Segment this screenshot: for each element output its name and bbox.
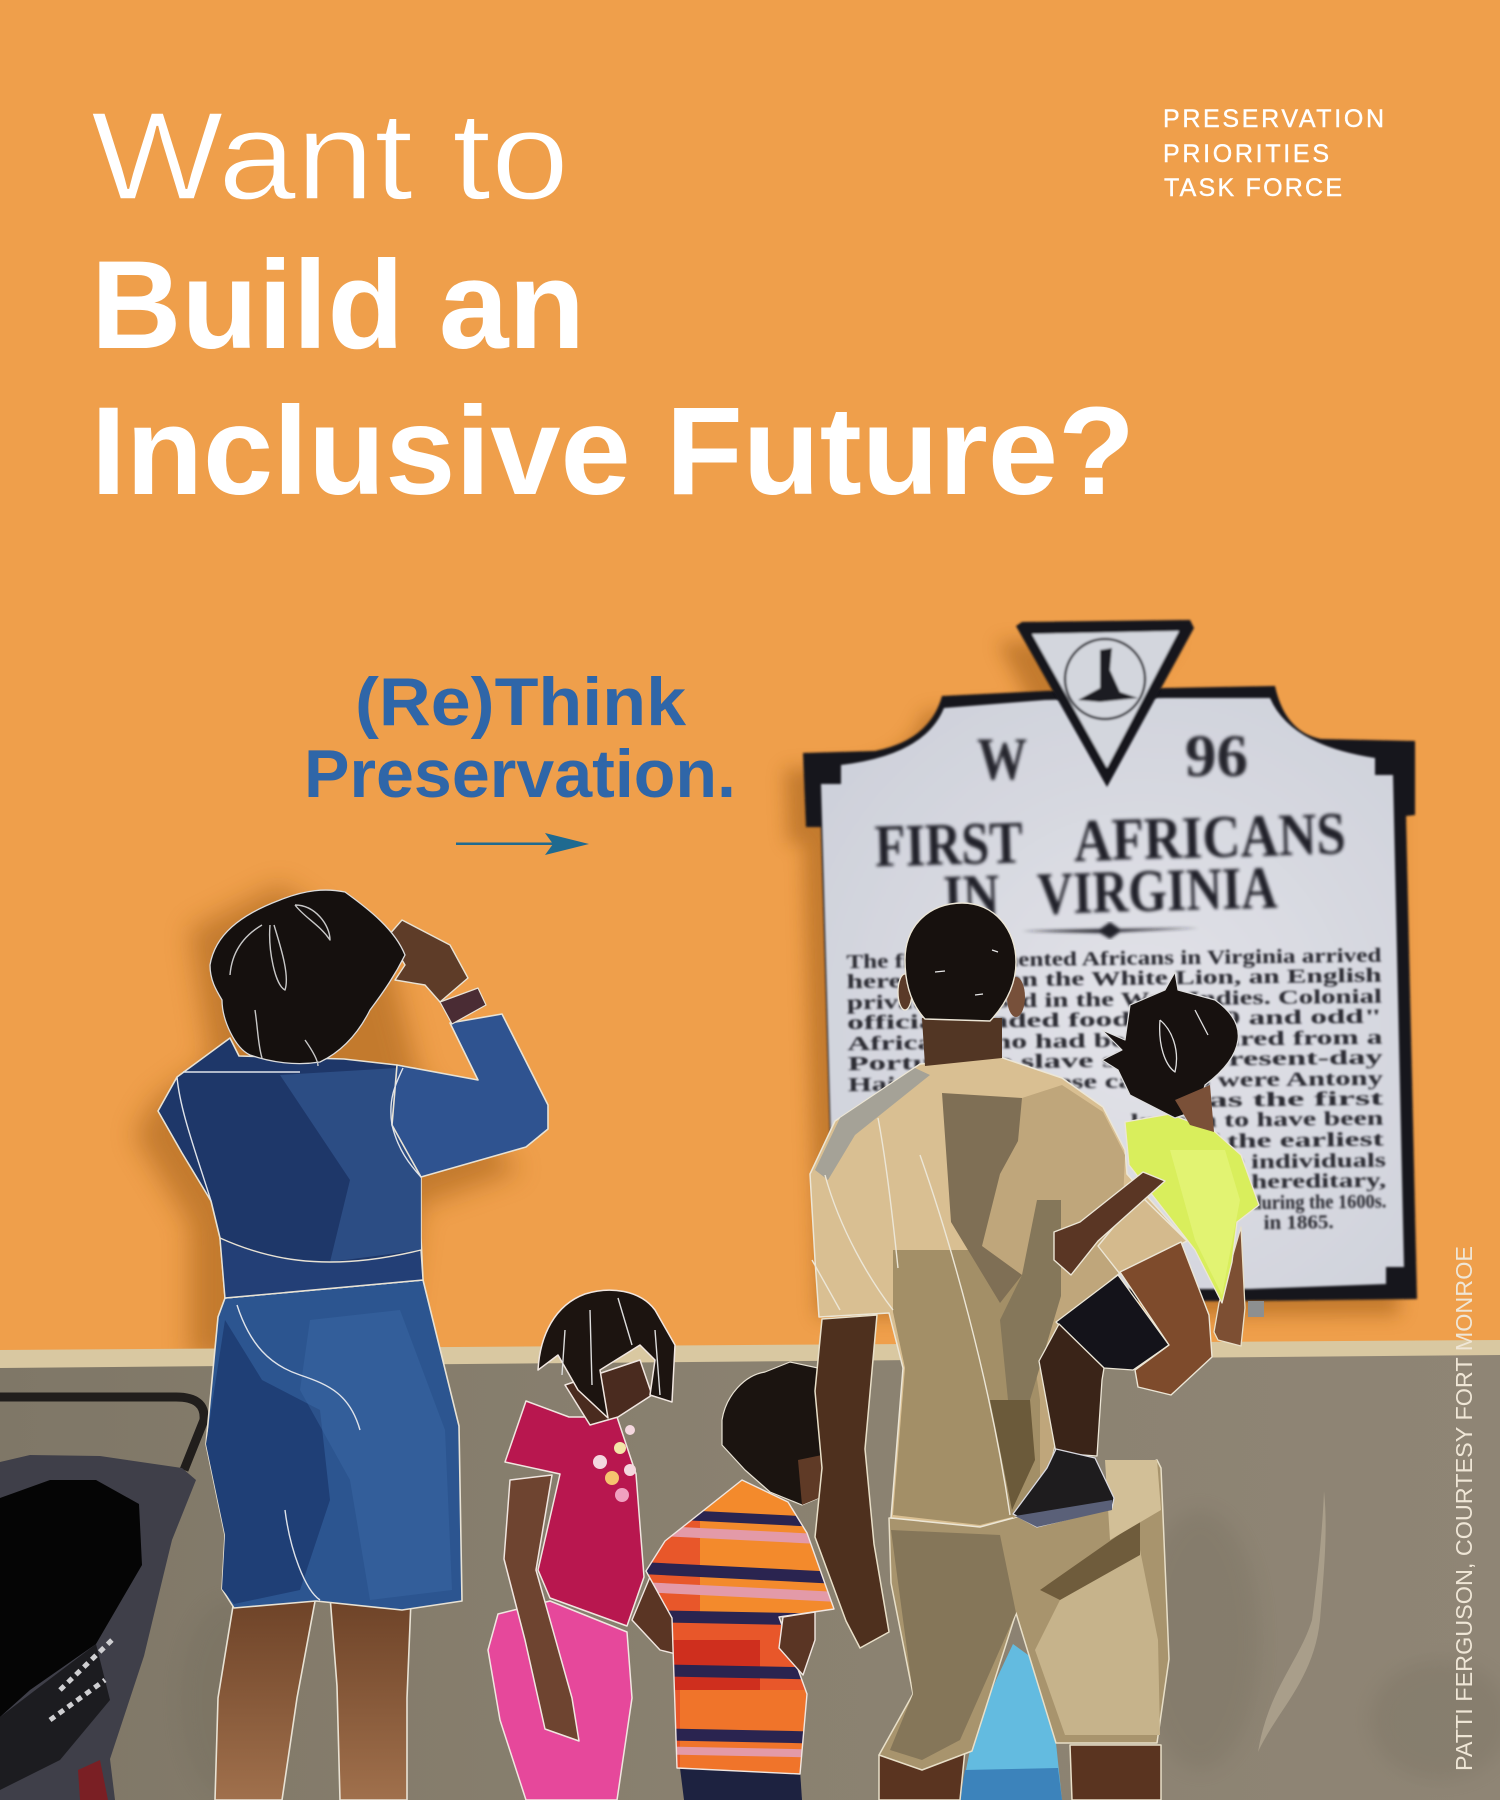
sign body text: Haiti. Among these captives were Antony (848, 1068, 1383, 1096)
toddler hair (1102, 972, 1238, 1118)
sign heading: FIRST (874, 809, 1024, 880)
woman in denim dress (158, 890, 548, 1800)
man shirt lower tone (893, 1250, 1040, 1525)
sign heading (874, 800, 1348, 932)
toddler leg (1039, 1324, 1104, 1456)
sign body text: Portuguese slave ship in present-day (848, 1047, 1383, 1075)
stroller (0, 1397, 204, 1800)
woman sleeve (392, 1014, 548, 1177)
concrete wall (0, 1340, 1500, 1800)
organization label (1163, 105, 1384, 202)
stroller shaded interior (0, 1480, 142, 1717)
woman hair (210, 890, 405, 1064)
man and toddler (810, 903, 1259, 1800)
woman skirt folds (206, 1320, 330, 1604)
man shirt seams (812, 1118, 1010, 1515)
woman belt (220, 1238, 423, 1298)
sign body text: Africans who had been captured from a (847, 1027, 1383, 1055)
boy pants (680, 1768, 802, 1800)
man left arm (815, 1315, 889, 1648)
man neck (922, 1018, 1002, 1066)
man shorts light panel (1035, 1550, 1160, 1735)
photo credit: PATTI FERGUSON, COURTESY FORT MONROE (1451, 1246, 1477, 1771)
arrow (456, 833, 589, 855)
boy in striped shirt (632, 1362, 840, 1800)
sign heading: IN (942, 862, 1000, 930)
man shorts (879, 1460, 1169, 1770)
woman hand and watch (388, 920, 468, 1002)
boy right arm (779, 1612, 815, 1675)
sign heading: AFRICANS (1073, 800, 1347, 874)
sign heading: VIRGINIA (1036, 854, 1278, 927)
sign body text: known to have been (1130, 1108, 1384, 1133)
sign body text: the individuals (1206, 1150, 1386, 1174)
toddler shoe (1013, 1449, 1114, 1527)
title: Inclusive Future? (91, 382, 1135, 521)
man shirt shadows (942, 1093, 1022, 1303)
tagline: Preservation. (304, 736, 736, 812)
sign number: W (977, 726, 1027, 792)
wall crack (1258, 1491, 1326, 1752)
title: Want to (91, 87, 569, 226)
man shirt right mid tone (960, 1085, 1125, 1518)
blue-clothed child behind man (960, 1644, 1062, 1800)
title (91, 87, 1135, 521)
wall ledge (0, 1340, 1500, 1368)
girl arm (504, 1475, 579, 1741)
girl face (565, 1360, 652, 1425)
sign body text (846, 945, 1387, 1239)
sign body text: privateer based in the West Indies. Colonial (847, 986, 1383, 1014)
sign triangle emblem (1016, 620, 1194, 787)
historic marker sign (803, 620, 1417, 1317)
girl hair (538, 1290, 675, 1418)
man right forearm (1120, 1242, 1212, 1395)
sign body text: during the 1600s. (1251, 1191, 1387, 1214)
girl pants (488, 1601, 632, 1800)
stroller handle (0, 1397, 204, 1470)
toddler shirt (1125, 1114, 1259, 1303)
toddler shorts (1056, 1275, 1169, 1370)
sign body (803, 686, 1417, 1301)
sign number (977, 723, 1248, 792)
cast shadows on the orange wall (135, 640, 1399, 1360)
title: Build an (91, 236, 585, 375)
woman legs (215, 1596, 411, 1800)
tagline (304, 664, 736, 812)
sign body text: The first documented Africans in Virginia arrived (846, 945, 1382, 973)
man legs (879, 1745, 1161, 1800)
sign divider (1022, 922, 1199, 939)
tagline: (Re)Think (355, 664, 686, 740)
man t-shirt (810, 1057, 1187, 1527)
sign body text: here in 1619 on the White Lion, an English (847, 965, 1382, 993)
boy left arm (632, 1565, 684, 1656)
sign number: 96 (1185, 723, 1248, 789)
wall mottling (180, 1510, 1500, 1800)
man head hair (905, 903, 1016, 1021)
sign body text: in 1865. (1264, 1211, 1334, 1234)
toddler right arm (1214, 1227, 1245, 1346)
stroller lower detail (0, 1644, 110, 1790)
toddler arm over shoulder (1054, 1172, 1165, 1275)
organization label: TASK FORCE (1164, 174, 1342, 202)
woman dress seams (177, 1068, 421, 1600)
sign body text: was the first (1180, 1088, 1384, 1112)
man right sleeve over child (1098, 1195, 1187, 1274)
organization label: PRESERVATION (1163, 105, 1384, 133)
girl in pink (488, 1290, 675, 1800)
organization label: PRIORITIES (1163, 140, 1329, 168)
toddler neck (1175, 1085, 1214, 1132)
girl shirt (505, 1401, 644, 1626)
woman dress skirt (206, 1280, 462, 1610)
man ears (898, 974, 912, 1010)
sign body text: officials traded food for "20 and odd" (847, 1006, 1382, 1034)
sign body text: hereditary, (1251, 1170, 1386, 1193)
stroller canopy (0, 1455, 196, 1800)
girl shirt floral print (593, 1425, 636, 1502)
sign body text: of the earliest (1191, 1129, 1384, 1153)
woman dress bodice (158, 1038, 423, 1298)
boy head (722, 1362, 826, 1505)
man shorts left shading (890, 1530, 1016, 1760)
sign post (1248, 1301, 1264, 1317)
boy striped shirt (646, 1480, 833, 1774)
